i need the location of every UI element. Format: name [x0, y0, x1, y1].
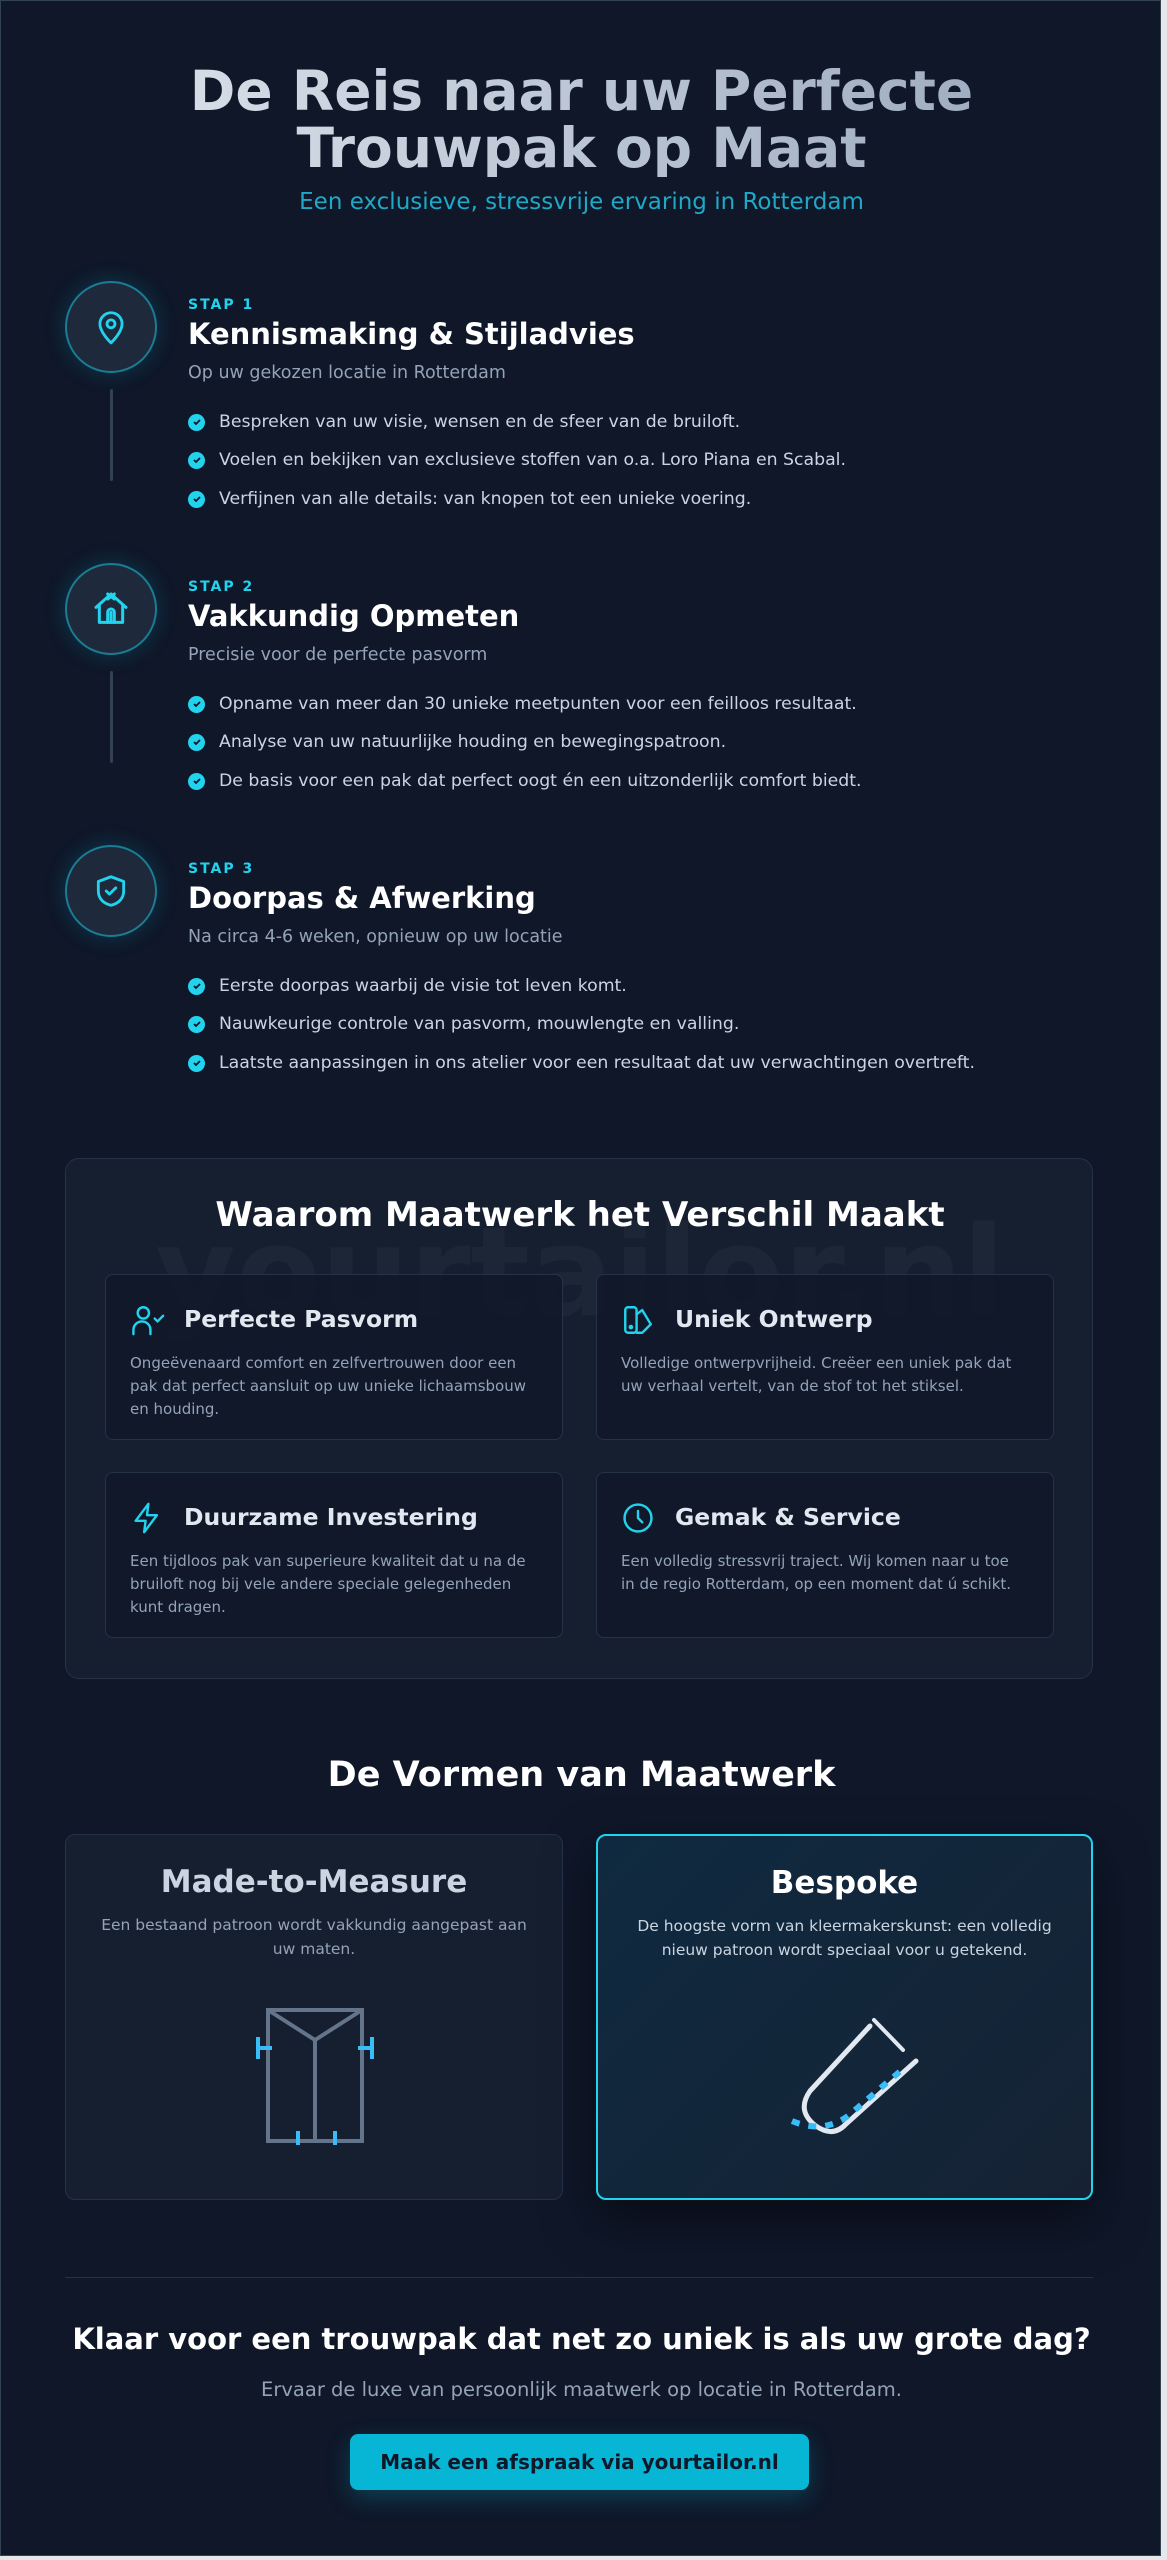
step 1 label: STAP 1: [188, 297, 254, 313]
bespoke title: Bespoke: [771, 1865, 918, 1901]
card: uniek ontwerp: Uniek Ontwerp: [675, 1305, 873, 1333]
title: De Reis naar uw Perfecte: [190, 59, 973, 123]
step 3 label: STAP 3: [188, 861, 254, 877]
step 2 bullets: De basis voor een pak dat perfect oogt én een uitzonderlijk comfort biedt.: [219, 771, 862, 791]
card: duurzame investering: Een tijdloos pak van superieure kwaliteit dat u na de bruiloft nog bij vele andere speciale gelegenheden kunt dragen.: [130, 1552, 526, 1616]
step 2 bullets: [188, 694, 862, 791]
step 3 heading: Doorpas & Afwerking: [188, 881, 536, 915]
step 2 label: STAP 2: [188, 579, 254, 595]
step 2 heading: Vakkundig Opmeten: [188, 599, 519, 633]
card: gemak en service: Een volledig stressvrij traject. Wij komen naar u toe in de regio Rotterdam, op een moment dat ú schikt.: [621, 1552, 1011, 1593]
step 1 bullets: [188, 412, 846, 509]
cta subtitle: Ervaar de luxe van persoonlijk maatwerk op locatie in Rotterdam.: [261, 2378, 902, 2401]
step 1 bullets: Verfijnen van alle details: van knopen tot een unieke voering.: [219, 489, 751, 509]
step 2 subtitle: Precisie voor de perfecte pasvorm: [188, 645, 487, 665]
step 3 bullets: Eerste doorpas waarbij de visie tot leven komt.: [219, 976, 627, 996]
bespoke text: De hoogste vorm van kleermakerskunst: een volledig nieuw patroon wordt speciaal voor u getekend.: [637, 1917, 1052, 1959]
icon: shield: [65, 845, 157, 937]
step 3 subtitle: Na circa 4-6 weken, opnieuw op uw locatie: [188, 927, 563, 947]
card: duurzame investering: [105, 1472, 563, 1638]
step 1 bullets: Voelen en bekijken van exclusieve stoffen van o.a. Loro Piana en Scabal.: [219, 450, 846, 470]
panel: bespoke: [596, 1834, 1093, 2200]
card: perfecte pasvorm: Perfecte Pasvorm: [184, 1305, 418, 1333]
step 3 bullets: Nauwkeurige controle van pasvorm, mouwlengte en valling.: [219, 1014, 739, 1034]
card: gemak en service: [596, 1472, 1054, 1638]
icon: jacket pattern: [256, 2008, 374, 2145]
cta button: Maak een afspraak via yourtailor.nl: [380, 2450, 779, 2474]
step 3 bullets: [188, 976, 975, 1073]
icon: chalk / needle: [790, 2018, 918, 2134]
card: perfecte pasvorm: [105, 1274, 563, 1440]
divider: [65, 2277, 1093, 2278]
step 1 bullets: Bespreken van uw visie, wensen en de sfeer van de bruiloft.: [219, 412, 740, 432]
panel: why bespoke: [65, 1158, 1093, 1679]
step 1 subtitle: Op uw gekozen locatie in Rotterdam: [188, 363, 506, 383]
mtm title: Made-to-Measure: [161, 1864, 467, 1900]
card: duurzame investering: Duurzame Investering: [184, 1503, 478, 1531]
heading: vormen: De Vormen van Maatwerk: [328, 1755, 835, 1795]
step 1 heading: Kennismaking & Stijladvies: [188, 317, 635, 351]
icon: house: [65, 563, 157, 655]
title: [1, 63, 1162, 177]
title: Trouwpak op Maat: [296, 116, 867, 180]
cta button: [350, 2434, 809, 2490]
cta heading: Klaar voor een trouwpak dat net zo uniek is als uw grote dag?: [72, 2322, 1091, 2356]
card: gemak en service: Gemak & Service: [675, 1503, 901, 1531]
step 3 bullets: Laatste aanpassingen in ons atelier voor een resultaat dat uw verwachtingen overtreft.: [219, 1053, 975, 1073]
mtm text: Een bestaand patroon wordt vakkundig aangepast aan uw maten.: [101, 1916, 527, 1958]
card: uniek ontwerp: [596, 1274, 1054, 1440]
card: uniek ontwerp: Volledige ontwerpvrijheid. Creëer een uniek pak dat uw verhaal vertelt, van de stof tot het stiksel.: [621, 1354, 1011, 1395]
watermark: yourtailor.nl: [155, 1201, 1005, 1345]
panel: made-to-measure: [65, 1834, 563, 2200]
panel heading: Waarom Maatwerk het Verschil Maakt: [215, 1195, 945, 1235]
step 2 bullets: Opname van meer dan 30 unieke meetpunten voor een feilloos resultaat.: [219, 694, 857, 714]
card: perfecte pasvorm: Ongeëvenaard comfort en zelfvertrouwen door een pak dat perfect aansluit op uw unieke lichaamsbouw en houding.: [130, 1354, 526, 1418]
subtitle: Een exclusieve, stressvrije ervaring in Rotterdam: [299, 189, 864, 215]
step 2 bullets: Analyse van uw natuurlijke houding en bewegingspatroon.: [219, 732, 726, 752]
icon: location pin: [65, 281, 157, 373]
